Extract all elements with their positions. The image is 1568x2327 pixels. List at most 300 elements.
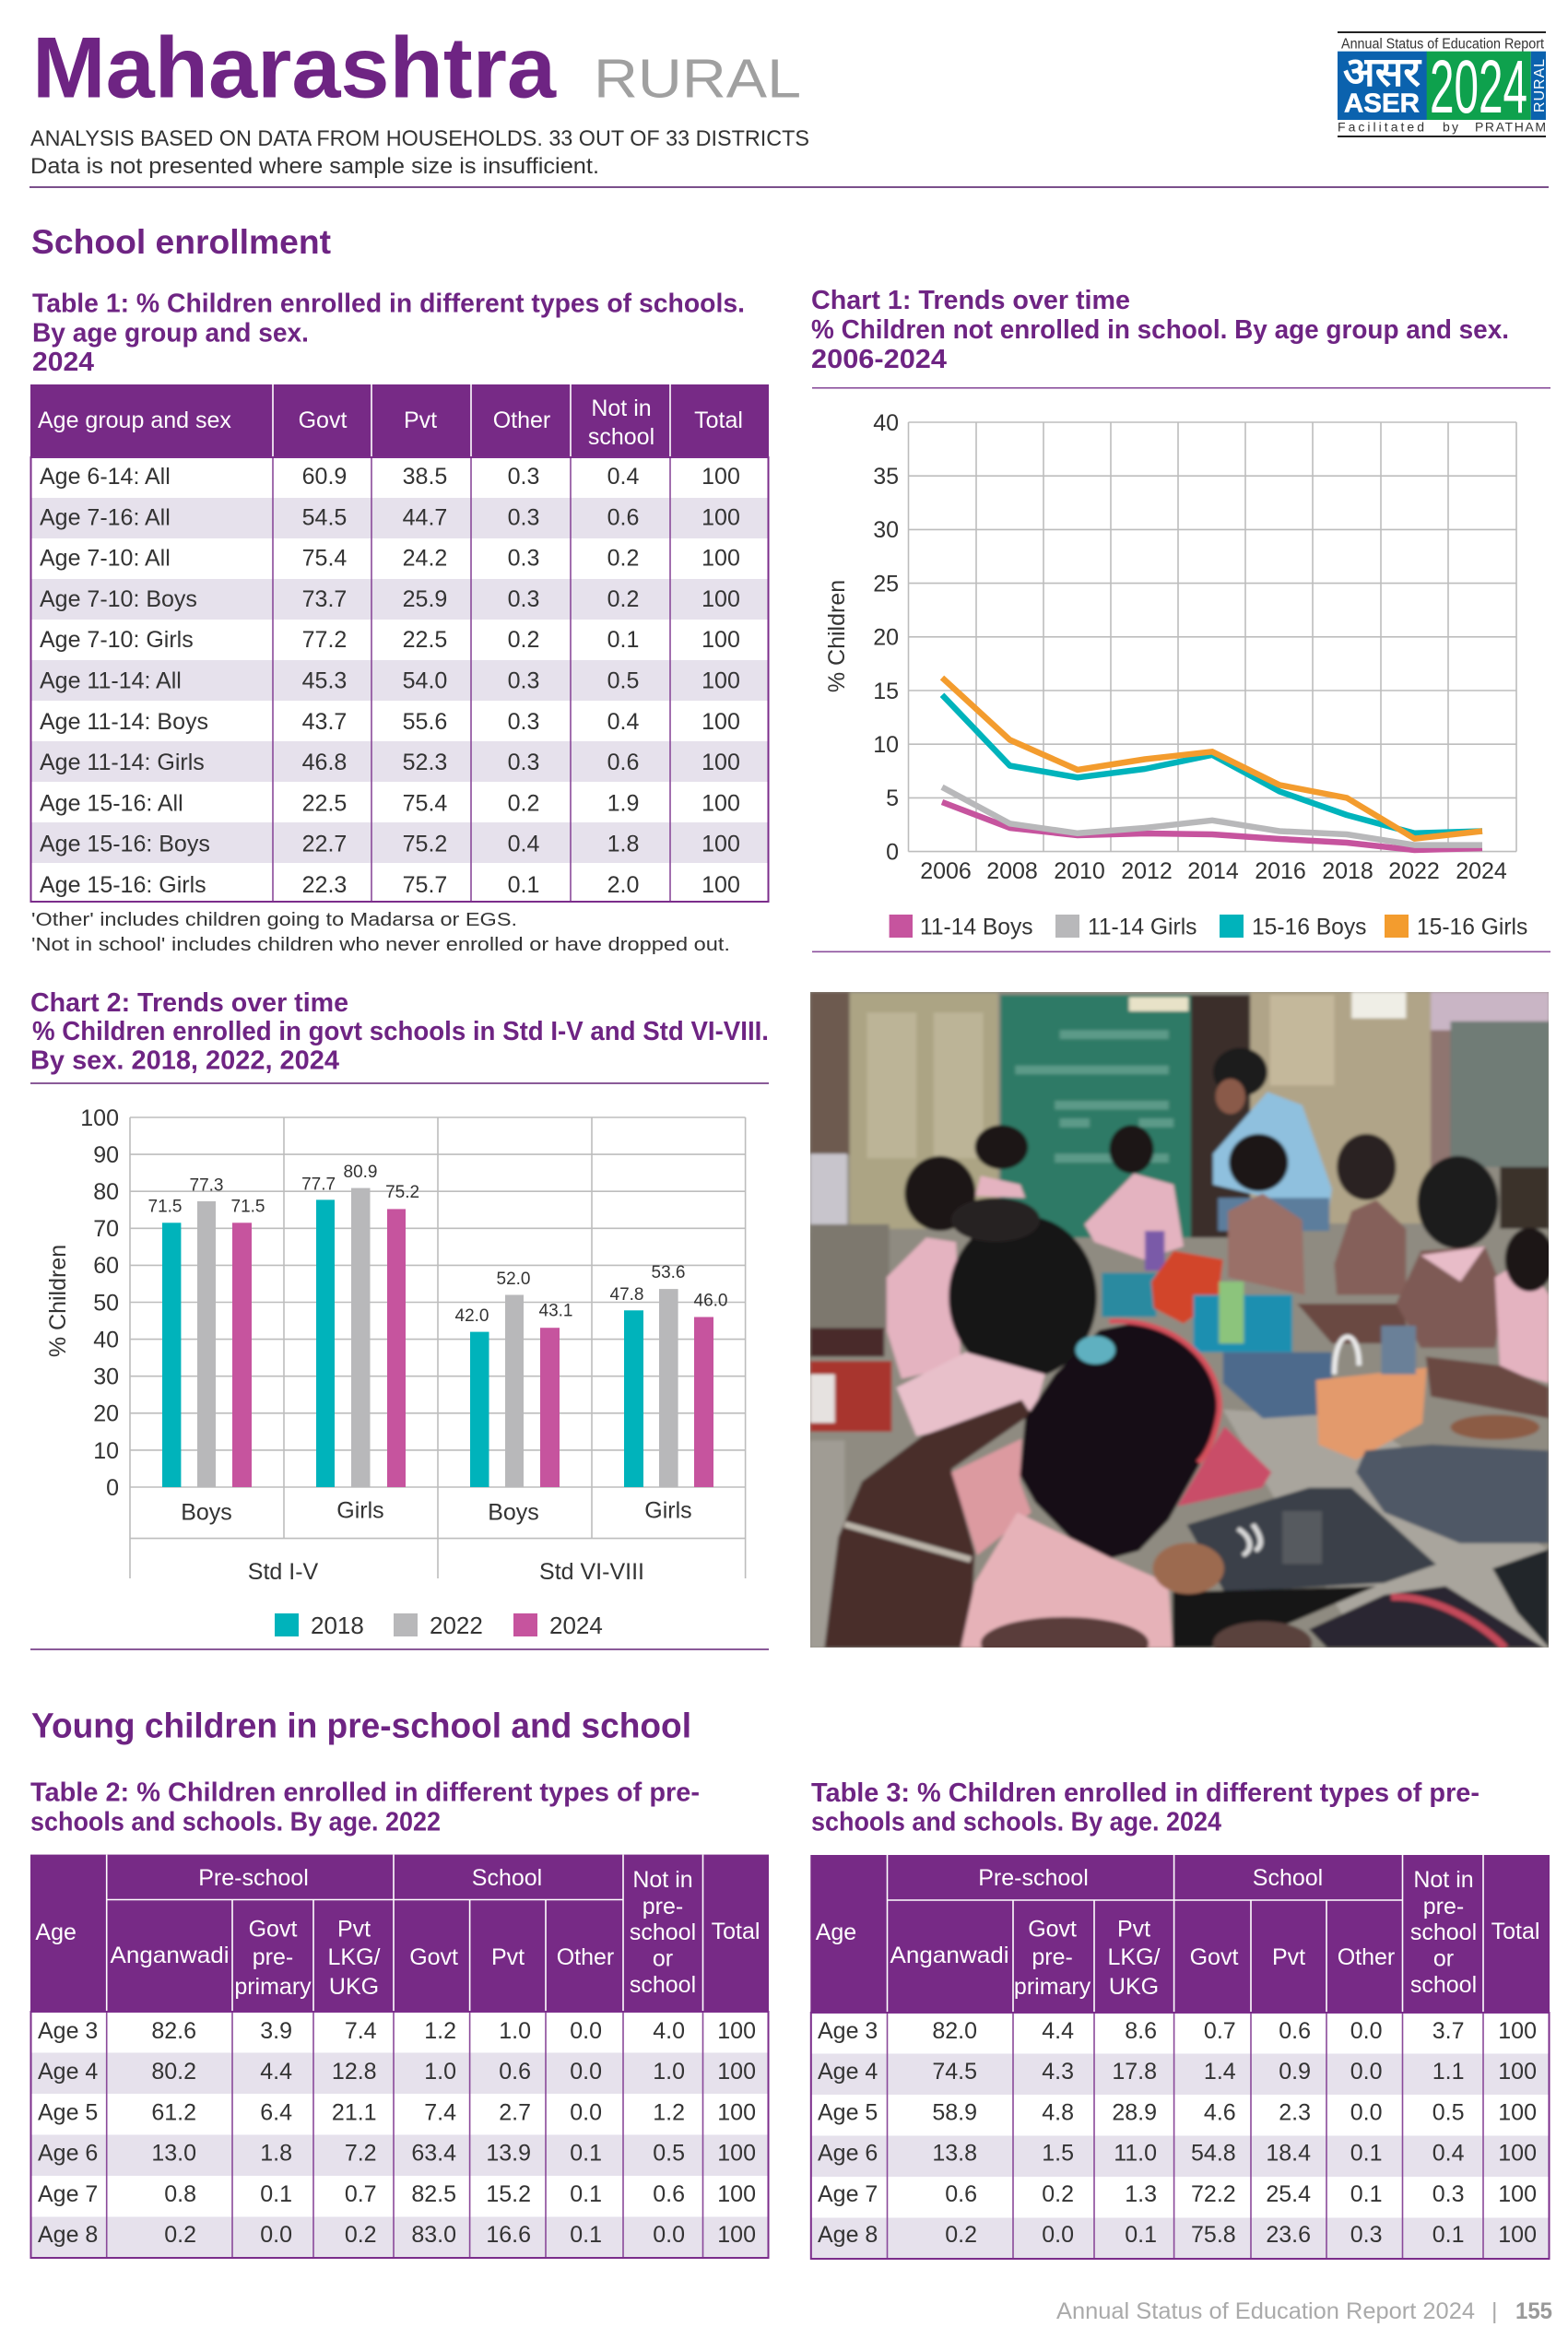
table 2 header: Not in — [632, 1867, 693, 1893]
table 3 header: UKG — [1109, 1974, 1159, 2000]
chart 2 category labels: Girls — [644, 1498, 692, 1524]
row: Age 6-14: All — [40, 464, 171, 490]
row: 1.0 — [424, 2059, 456, 2085]
row: 82.6 — [151, 2018, 196, 2044]
table 2 header: Govt — [409, 1944, 458, 1970]
table 1 header: Total — [694, 408, 743, 433]
table 3 header — [810, 1855, 1550, 2013]
row — [38, 2099, 756, 2125]
row: 24.2 — [403, 546, 447, 572]
logo: ASER 2024: Annual Status of Education Report — [1341, 36, 1545, 52]
row: 0.3 — [508, 546, 539, 572]
row: 0.3 — [508, 464, 539, 490]
row — [40, 627, 740, 653]
row: Age 6 — [818, 2141, 878, 2167]
row: 0.2 — [164, 2222, 196, 2248]
logo: ASER 2024: by — [1443, 120, 1458, 135]
row: 4.0 — [653, 2018, 685, 2044]
row — [40, 667, 740, 693]
bars: Std I-V Girls: 80.9 — [344, 1163, 377, 1182]
row: 100 — [701, 709, 740, 735]
line: 11-14 Girls — [942, 787, 1482, 845]
line: 15-16 Boys — [942, 695, 1482, 833]
row: Age 8 — [38, 2222, 98, 2248]
table 2 title — [30, 1778, 700, 1837]
row: 0.0 — [570, 2099, 602, 2125]
row: 44.7 — [403, 504, 447, 530]
row: 0.4 — [607, 709, 639, 735]
row: 0.1 — [1350, 2181, 1383, 2207]
table 3 header: Pvt — [1272, 1944, 1305, 1970]
row: 4.6 — [1204, 2099, 1236, 2125]
table 3 — [810, 1855, 1550, 2259]
chart 2 legend: 2018 — [311, 1612, 364, 1639]
row: 4.4 — [260, 2059, 292, 2085]
table 3 header: Govt — [1028, 1917, 1077, 1943]
row: 4.8 — [1042, 2099, 1074, 2125]
chart 1 x axis labels: 2024 — [1456, 858, 1507, 884]
row: 0.0 — [260, 2222, 292, 2248]
row: 100 — [1498, 2141, 1537, 2167]
row: 0.3 — [508, 586, 539, 612]
row: 4.3 — [1042, 2059, 1074, 2085]
chart 1 x axis labels: 2016 — [1255, 858, 1306, 884]
row: 0.6 — [607, 750, 639, 775]
heading: Young children in pre-school and school: Young children in pre-school and school — [31, 1707, 691, 1746]
row: 0.0 — [570, 2059, 602, 2085]
table 1 header: school — [588, 424, 654, 450]
row: 0.1 — [1125, 2222, 1157, 2248]
chart 1 x axis labels: 2018 — [1322, 858, 1373, 884]
row — [818, 2059, 1537, 2085]
bars: Std VI-VIII Girls: 46.0 — [694, 1291, 727, 1311]
table 3 header: LKG/ — [1108, 1944, 1161, 1970]
row: 100 — [717, 2141, 756, 2167]
row: 2.7 — [499, 2099, 531, 2125]
row: 100 — [701, 667, 740, 693]
row: 6.4 — [260, 2099, 292, 2125]
row: 11.0 — [1114, 2141, 1157, 2167]
row: 22.7 — [302, 832, 347, 857]
chart 2 category labels: Std VI-VIII — [539, 1559, 644, 1585]
table 2 header: school — [630, 1919, 696, 1945]
row: 80.2 — [151, 2059, 196, 2085]
chart 2 y axis labels: 90 — [93, 1142, 119, 1168]
row — [818, 2018, 1537, 2044]
table 2 header: Pvt — [337, 1917, 371, 1943]
chart 1 x axis labels: 2022 — [1388, 858, 1440, 884]
bars: Std I-V Girls: 75.2 — [385, 1183, 419, 1202]
row: 16.6 — [486, 2222, 531, 2248]
chart 2 category labels — [181, 1498, 692, 1585]
table 3 header: Pre-school — [978, 1865, 1089, 1891]
table 3 header: Govt — [1190, 1944, 1238, 1970]
footer: report name and page number: 155 — [1515, 2298, 1552, 2324]
table 1 footnotes — [31, 909, 730, 955]
row: 0.2 — [508, 790, 539, 816]
row — [38, 2018, 756, 2044]
row: 75.2 — [403, 832, 447, 857]
header: state title — [32, 19, 801, 116]
row: 12.8 — [332, 2059, 377, 2085]
row: Age 3 — [38, 2018, 98, 2044]
row: 1.0 — [499, 2018, 531, 2044]
row — [818, 2099, 1537, 2125]
row: 0.1 — [570, 2222, 602, 2248]
row: 60.9 — [302, 464, 347, 490]
row: 13.8 — [932, 2141, 977, 2167]
header: analysis note: Data is not presented where sample size is insufficient. — [30, 154, 599, 179]
chart 2 y axis labels: 80 — [93, 1179, 119, 1205]
table 3 header: Age — [816, 1919, 856, 1945]
row: 100 — [717, 2181, 756, 2207]
row: 54.0 — [403, 667, 447, 693]
chart 1 title — [811, 286, 1509, 374]
row: 38.5 — [403, 464, 447, 490]
header: analysis note: ANALYSIS BASED ON DATA FROM HOUSEHOLDS. 33 OUT OF 33 DISTRICTS — [30, 126, 809, 151]
row: 0.4 — [1432, 2141, 1465, 2167]
chart 1 legend: 15-16 Girls — [1417, 915, 1527, 940]
row: 18.4 — [1266, 2141, 1311, 2167]
chart 1 x axis labels: 2006 — [920, 858, 972, 884]
table 2 header: Total — [712, 1919, 760, 1944]
table 2 header: Age — [35, 1919, 77, 1945]
row: 100 — [701, 627, 740, 653]
chart 2 y axis title: % Children — [45, 1245, 71, 1357]
row: 63.4 — [411, 2141, 456, 2167]
row — [40, 750, 740, 775]
bars: Std VI-VIII Girls — [610, 1263, 727, 1487]
table 3 header: or — [1433, 1946, 1454, 1972]
chart 2 y axis labels — [80, 1105, 119, 1501]
table 1 header: Not in — [591, 396, 652, 421]
chart 2 y axis labels: 60 — [93, 1253, 119, 1279]
table 2 header: LKG/ — [328, 1944, 381, 1970]
row: 1.4 — [1204, 2059, 1236, 2085]
row: 1.8 — [607, 832, 639, 857]
row: 0.8 — [164, 2181, 196, 2207]
bars: Std I-V Boys — [148, 1176, 265, 1487]
row: 21.1 — [332, 2099, 377, 2125]
row — [40, 790, 740, 816]
table 3 title — [811, 1778, 1480, 1837]
chart 1 y axis labels: 25 — [873, 572, 899, 597]
table 3 header: Other — [1338, 1944, 1395, 1970]
row: 55.6 — [403, 709, 447, 735]
row: 100 — [1498, 2181, 1537, 2207]
chart 2: bar chart — [45, 1105, 746, 1585]
row — [818, 2141, 1537, 2167]
table 1 header: Pvt — [404, 408, 437, 433]
row: 45.3 — [302, 667, 347, 693]
row: 82.5 — [411, 2181, 456, 2207]
row: 0.1 — [570, 2181, 602, 2207]
row: 0.6 — [653, 2181, 685, 2207]
row: 0.6 — [945, 2181, 977, 2207]
row: 46.8 — [302, 750, 347, 775]
row: 13.0 — [151, 2141, 196, 2167]
heading: School enrollment: School enrollment — [31, 223, 331, 261]
row — [38, 2181, 756, 2207]
table 3 header: Not in — [1413, 1867, 1474, 1893]
row: 0.3 — [508, 750, 539, 775]
chart 2 category labels: Boys — [181, 1499, 232, 1525]
row: 1.2 — [653, 2099, 685, 2125]
table 1 footnotes: 'Other' includes children going to Madarsa or EGS. — [31, 909, 517, 930]
table 3 header: pre- — [1032, 1944, 1073, 1970]
table 2 header: Pre-school — [198, 1865, 309, 1891]
row: 13.9 — [486, 2141, 531, 2167]
row: 22.5 — [403, 627, 447, 653]
chart 2 title — [30, 988, 769, 1075]
row: Age 7 — [38, 2181, 98, 2207]
row: 0.6 — [499, 2059, 531, 2085]
row: 100 — [1498, 2018, 1537, 2044]
chart 2 y axis labels: 30 — [93, 1364, 119, 1390]
table 2 header: Other — [557, 1944, 614, 1970]
chart 2 y axis labels: 70 — [93, 1216, 119, 1242]
table 2 header: Govt — [249, 1917, 297, 1943]
row: 0.3 — [508, 504, 539, 530]
table 1 header: Govt — [299, 408, 347, 433]
row: 15.2 — [486, 2181, 531, 2207]
header: state title: RURAL — [594, 49, 801, 110]
bars: Std VI-VIII Boys — [455, 1270, 572, 1487]
table 2 header: or — [653, 1946, 673, 1972]
row: 0.7 — [345, 2181, 377, 2207]
row: 100 — [701, 504, 740, 530]
row: 1.5 — [1042, 2141, 1074, 2167]
chart 2 title: By sex. 2018, 2022, 2024 — [30, 1045, 339, 1075]
table 1 header — [30, 384, 769, 457]
chart 2 y axis labels: 50 — [93, 1291, 119, 1317]
row: 75.4 — [403, 790, 447, 816]
table 2 header: UKG — [329, 1974, 379, 2000]
table 3 title: Table 3: % Children enrolled in different types of pre- — [811, 1778, 1480, 1808]
chart 1 y axis labels — [873, 410, 899, 865]
row: 0.4 — [508, 832, 539, 857]
chart 2 title: Chart 2: Trends over time — [30, 988, 348, 1018]
logo: ASER 2024: RURAL — [1532, 59, 1548, 112]
row: 100 — [701, 750, 740, 775]
chart 1 x axis labels: 2008 — [986, 858, 1038, 884]
row: Age 8 — [818, 2222, 878, 2248]
bars: Std VI-VIII Girls: 47.8 — [610, 1285, 643, 1305]
chart 1 legend: 11-14 Boys — [920, 915, 1033, 940]
chart 1 legend: 15-16 Boys — [1252, 915, 1366, 940]
row: 1.1 — [1432, 2059, 1464, 2085]
table 3 header: Anganwadi — [890, 1943, 1008, 1968]
row: 0.9 — [1279, 2059, 1311, 2085]
row: 100 — [717, 2222, 756, 2248]
row: Age 7-10: Girls — [40, 627, 194, 653]
table 3 header: school — [1410, 1919, 1477, 1945]
table 2 header: School — [472, 1865, 542, 1891]
row: 17.8 — [1112, 2059, 1157, 2085]
row: 100 — [701, 586, 740, 612]
row: 100 — [701, 790, 740, 816]
table 2 header: Pvt — [491, 1944, 525, 1970]
row: 1.3 — [1125, 2181, 1157, 2207]
line: 11-14 Boys — [942, 802, 1482, 850]
row: 75.8 — [1191, 2222, 1236, 2248]
line: 15-16 Girls — [942, 678, 1482, 839]
row — [40, 546, 740, 572]
row: 0.2 — [1042, 2181, 1074, 2207]
row: 2.3 — [1279, 2099, 1311, 2125]
bars: Std VI-VIII Boys: 52.0 — [497, 1270, 530, 1289]
row: 100 — [701, 872, 740, 898]
row: 25.4 — [1266, 2181, 1311, 2207]
chart 2 category labels: Girls — [336, 1498, 384, 1524]
row: 82.0 — [932, 2018, 977, 2044]
chart 2 category labels: Std I-V — [248, 1559, 319, 1585]
chart 1 title: % Children not enrolled in school. By age group and sex. — [811, 315, 1509, 345]
row — [40, 872, 740, 898]
row: 0.3 — [508, 667, 539, 693]
row: 58.9 — [932, 2099, 977, 2125]
row: 72.2 — [1191, 2181, 1236, 2207]
row: 0.6 — [1279, 2018, 1311, 2044]
row: 28.9 — [1112, 2099, 1157, 2125]
bars: Std I-V Boys: 71.5 — [148, 1197, 182, 1217]
row — [40, 504, 740, 530]
chart 1 y axis labels: 30 — [873, 517, 899, 543]
row: 0.1 — [1350, 2141, 1383, 2167]
row — [40, 832, 740, 857]
chart 1 y axis labels: 0 — [886, 839, 899, 865]
chart 2 y axis labels: 10 — [93, 1438, 119, 1464]
row: Age 7 — [818, 2181, 878, 2207]
logo: ASER 2024 — [1338, 31, 1548, 137]
chart 2 y axis labels: 0 — [106, 1475, 119, 1501]
header: state title: Maharashtra — [32, 19, 557, 116]
row: 7.4 — [424, 2099, 456, 2125]
row: 1.8 — [260, 2141, 292, 2167]
row — [38, 2059, 756, 2085]
row: 0.5 — [607, 667, 639, 693]
row: 77.2 — [302, 627, 347, 653]
chart 2 legend: 2024 — [549, 1612, 603, 1639]
chart 1 title: 2006-2024 — [811, 345, 947, 374]
chart 1 y axis labels: 20 — [873, 625, 899, 651]
row: 0.5 — [1432, 2099, 1464, 2125]
footer: report name and page number: Annual Status of Education Report 2024 — [1056, 2298, 1475, 2324]
row: 22.5 — [302, 790, 347, 816]
row: 0.2 — [945, 2222, 977, 2248]
chart 2 y axis labels: 20 — [93, 1401, 119, 1427]
row: 1.0 — [653, 2059, 685, 2085]
table 2 title: schools and schools. By age. 2022 — [30, 1807, 441, 1837]
chart 2 title: % Children enrolled in govt schools in Std I-V and Std VI-VIII. — [32, 1017, 769, 1046]
table 3 header: Pvt — [1117, 1917, 1150, 1943]
table 1 header: Other — [493, 408, 550, 433]
row: 100 — [717, 2059, 756, 2085]
row: 0.1 — [570, 2141, 602, 2167]
logo: ASER 2024: Facilitated — [1338, 120, 1424, 135]
row: 3.9 — [260, 2018, 292, 2044]
chart 1 x axis labels: 2014 — [1187, 858, 1239, 884]
row: 25.9 — [403, 586, 447, 612]
row: Age 4 — [818, 2059, 878, 2085]
logo: ASER 2024: असर — [1343, 50, 1422, 95]
row — [40, 464, 740, 490]
row: 0.3 — [508, 709, 539, 735]
row — [38, 2141, 756, 2167]
table 1 — [30, 384, 769, 902]
row: 0.1 — [607, 627, 639, 653]
bars: Std I-V Girls: 77.7 — [301, 1175, 336, 1195]
row: Age 7-10: Boys — [40, 586, 197, 612]
row — [40, 709, 740, 735]
row: Age 15-16: All — [40, 790, 183, 816]
row: Age 11-14: All — [40, 667, 182, 693]
row — [38, 2222, 756, 2248]
row: 0.1 — [508, 872, 539, 898]
table 2 header: primary — [234, 1974, 312, 2000]
row: 0.2 — [607, 586, 639, 612]
row: 0.0 — [1350, 2018, 1383, 2044]
chart 1 title: Chart 1: Trends over time — [811, 286, 1130, 315]
row: 4.4 — [1042, 2018, 1074, 2044]
row: 61.2 — [151, 2099, 196, 2125]
row: 0.0 — [653, 2222, 685, 2248]
table 2 — [30, 1855, 769, 2258]
chart 1 x axis labels: 2012 — [1121, 858, 1173, 884]
row: Age 15-16: Boys — [40, 832, 210, 857]
table 1 title — [32, 289, 745, 377]
bars: Std I-V Boys: 71.5 — [231, 1197, 265, 1217]
row: 1.9 — [607, 790, 639, 816]
bars: Std I-V Girls — [301, 1163, 419, 1487]
row: 100 — [701, 464, 740, 490]
row — [818, 2222, 1537, 2248]
table 2 header: Anganwadi — [111, 1943, 229, 1968]
row: 100 — [1498, 2222, 1537, 2248]
row: 0.2 — [345, 2222, 377, 2248]
row: 7.4 — [345, 2018, 377, 2044]
row: Age 4 — [38, 2059, 98, 2085]
row: 73.7 — [302, 586, 347, 612]
table 2 header — [30, 1855, 769, 2012]
table 1 title: 2024 — [32, 348, 94, 377]
row: 0.3 — [1350, 2222, 1383, 2248]
table 1 footnotes: 'Not in school' includes children who never enrolled or have dropped out. — [31, 934, 730, 955]
logo: ASER 2024: ASER — [1344, 89, 1420, 118]
row: Age 11-14: Girls — [40, 750, 205, 775]
footer: report name and page number: | — [1491, 2298, 1497, 2324]
table 1 title: By age group and sex. — [32, 319, 309, 348]
row: 83.0 — [411, 2222, 456, 2248]
row: 0.2 — [607, 546, 639, 572]
row: 0.0 — [1350, 2059, 1383, 2085]
chart 1: line chart — [824, 410, 1516, 884]
chart 1 y axis labels: 35 — [873, 464, 899, 490]
row: 23.6 — [1266, 2222, 1311, 2248]
bars: Std VI-VIII Girls: 53.6 — [652, 1263, 685, 1282]
table 3 header: primary — [1014, 1974, 1091, 2000]
row: 0.1 — [1432, 2222, 1464, 2248]
chart 2 legend: 2022 — [430, 1612, 483, 1639]
row: Age 3 — [818, 2018, 878, 2044]
row: Age 6 — [38, 2141, 98, 2167]
row: 54.8 — [1191, 2141, 1236, 2167]
bars: Std VI-VIII Boys: 42.0 — [455, 1306, 489, 1326]
row: 3.7 — [1432, 2018, 1464, 2044]
chart 1 y axis labels: 15 — [873, 679, 899, 704]
row: 0.0 — [1350, 2099, 1383, 2125]
chart 1 x axis labels — [920, 858, 1507, 884]
